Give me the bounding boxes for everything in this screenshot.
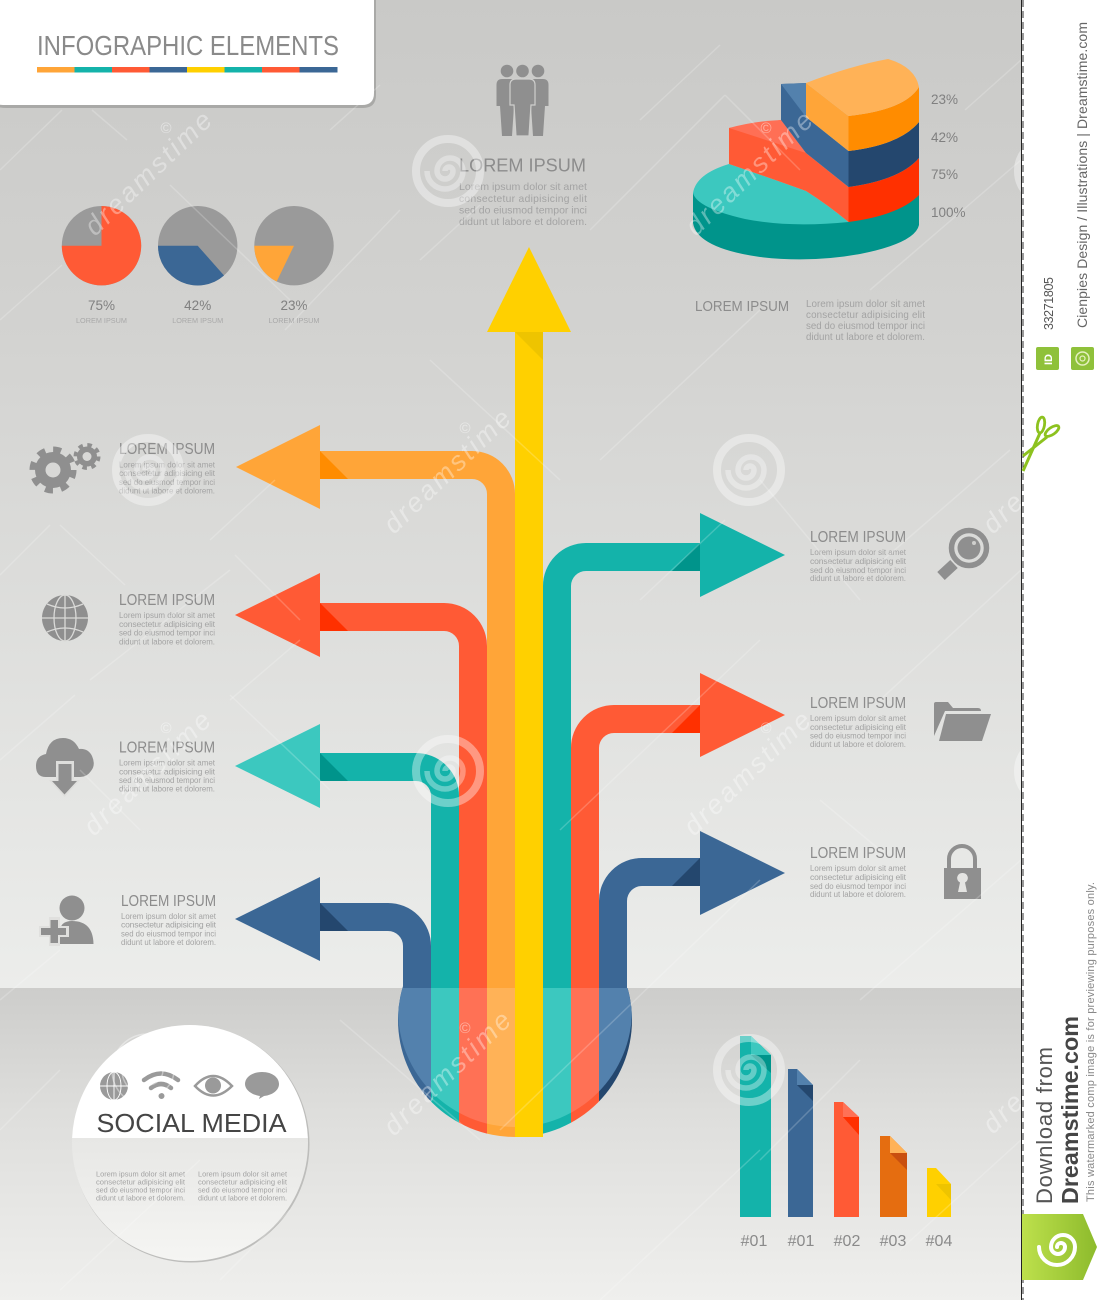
icon: globe: [42, 595, 88, 641]
arrow: orange left: [236, 425, 501, 990]
chart labels: 23%: [931, 92, 958, 107]
arrow: blue right: [613, 831, 785, 990]
row: add user: [39, 893, 217, 947]
text: lock: consectetur adipisicing elit: [810, 872, 907, 882]
text: social column 2: Lorem ipsum dolor sit amet: [198, 1170, 288, 1178]
text: search: consectetur adipisicing elit: [810, 556, 907, 566]
slice: 23% orange: [806, 59, 919, 151]
flat pie charts: [62, 206, 334, 325]
text: add user: Lorem ipsum dolor sit amet: [121, 911, 217, 921]
slice: 100% teal base: [693, 164, 919, 259]
text: lock: didunt ut labore et dolorem.: [810, 889, 906, 899]
text: folder: consectetur adipisicing elit: [810, 722, 907, 732]
text: gears: didunt ut labore et dolorem.: [119, 486, 215, 496]
text: globe: didunt ut labore et dolorem.: [119, 636, 215, 646]
icon: eye: [195, 1076, 232, 1096]
text block: chart caption: consectetur adipisicing elit: [806, 310, 925, 321]
bulb: arrow root: [395, 980, 635, 1140]
arrow: red left: [235, 573, 473, 990]
text: globe: consectetur adipisicing elit: [119, 619, 216, 629]
text: add user: [121, 893, 217, 947]
icon: speech bubble: [245, 1072, 279, 1099]
text: globe: Lorem ipsum dolor sit amet: [119, 610, 216, 620]
text: social column 2: consectetur adipisicing elit: [198, 1178, 288, 1186]
arrow: blue left: [235, 877, 417, 990]
panel: upper background: [0, 0, 1021, 988]
bar 2: [788, 1069, 813, 1217]
text: folder: [810, 695, 907, 749]
title: INFOGRAPHIC ELEMENTS: [37, 30, 339, 61]
text block: chart caption: sed do eiusmod tempor inci: [806, 321, 925, 332]
pie 42%: 42%: [184, 298, 211, 313]
heading: social media: SOCIAL MEDIA: [96, 1108, 287, 1138]
text block: top heading: [459, 154, 587, 228]
text: social column 1: consectetur adipisicing elit: [96, 1178, 186, 1186]
text block: chart caption: didunt ut labore et dolorem.: [806, 332, 925, 343]
icon: id badge: [1036, 347, 1059, 370]
pie 42%: LOREM IPSUM: [172, 316, 223, 325]
icon: magnifier: [941, 530, 986, 576]
icon: small globe: [100, 1072, 128, 1100]
text: cloud: Lorem ipsum dolor sit amet: [119, 758, 216, 768]
text: social column 1: didunt ut labore et dolorem.: [96, 1194, 185, 1202]
text: gears: Lorem ipsum dolor sit amet: [119, 460, 216, 470]
text: cloud: didunt ut labore et dolorem.: [119, 784, 215, 794]
watermark overlay: ©: [459, 1020, 471, 1037]
text: gears: LOREM IPSUM: [119, 441, 215, 458]
bar labels: #01: [741, 1233, 767, 1250]
text: social column 2: sed do eiusmod tempor inci: [198, 1186, 287, 1194]
text block: top heading: Lorem ipsum dolor sit amet: [459, 182, 587, 193]
text: search: didunt ut labore et dolorem.: [810, 573, 906, 583]
text: globe: [119, 592, 216, 646]
chart labels: [931, 92, 966, 220]
text: add user: LOREM IPSUM: [121, 893, 216, 910]
download heading: [1032, 1016, 1083, 1204]
row: folder: [810, 695, 991, 749]
icon: group of people: [496, 65, 548, 136]
text block: chart caption: LOREM IPSUM: [695, 299, 789, 315]
text block: chart caption: [695, 299, 925, 343]
text: folder: sed do eiusmod tempor inci: [810, 730, 906, 740]
bar 4: [880, 1136, 907, 1217]
arrow: teal right: [557, 513, 785, 990]
bar 1: [740, 1036, 771, 1217]
icon: add user: [39, 896, 94, 946]
watermark overlay: dreamstime: [77, 705, 217, 841]
icon: folder: [934, 702, 991, 741]
text: folder: LOREM IPSUM: [810, 695, 906, 712]
text block: top heading: consectetur adipisicing elit: [459, 194, 587, 205]
watermark overlay: ©: [459, 420, 471, 437]
text: folder: Lorem ipsum dolor sit amet: [810, 713, 907, 723]
text: globe: LOREM IPSUM: [119, 592, 215, 609]
text: folder: didunt ut labore et dolorem.: [810, 739, 906, 749]
row: globe: [42, 592, 216, 646]
pie 23%: [254, 206, 334, 325]
bar labels: #02: [834, 1233, 860, 1250]
text: lock: Lorem ipsum dolor sit amet: [810, 863, 907, 873]
icon: cloud download: [36, 738, 94, 797]
text: social column 1: sed do eiusmod tempor inci: [96, 1186, 185, 1194]
arrow: red right: [585, 673, 785, 990]
watermark overlay: dreamstime: [679, 105, 819, 241]
text: search: sed do eiusmod tempor inci: [810, 565, 906, 575]
text: globe: sed do eiusmod tempor inci: [119, 628, 215, 638]
text: lock: [810, 845, 907, 899]
row: lock: [810, 845, 981, 899]
pie 23%: LOREM IPSUM: [268, 316, 320, 325]
text: add user: sed do eiusmod tempor inci: [121, 928, 216, 938]
text: search: LOREM IPSUM: [810, 529, 906, 546]
icon: scissors: [1023, 417, 1061, 471]
panel: lower background: [0, 988, 1021, 1300]
bar labels: #04: [926, 1233, 952, 1250]
text: cloud: consectetur adipisicing elit: [119, 766, 216, 776]
text: social column 2: didunt ut labore et dolorem.: [198, 1194, 287, 1202]
icon: copyright badge: [1071, 347, 1094, 370]
chart labels: 100%: [931, 205, 966, 220]
watermark overlay: dreamstime: [377, 1005, 517, 1141]
text: search: Lorem ipsum dolor sit amet: [810, 547, 907, 557]
panel: social media circle: [72, 1025, 310, 1262]
arrow: yellow up: [487, 247, 571, 1137]
watermark overlay: dreamstime: [677, 705, 817, 841]
watermark overlay: ©: [160, 120, 172, 137]
3D stepped pie chart: [693, 59, 966, 259]
folded bar chart: [740, 1036, 952, 1250]
disclaimer: This watermarked comp image is for previewing purposes only.: [1085, 882, 1097, 1202]
bar labels: [741, 1233, 952, 1250]
text: gears: [119, 441, 216, 496]
pie 75%: LOREM IPSUM: [76, 316, 127, 325]
watermark overlay: dreamstime: [377, 403, 517, 539]
text: social column 2: [198, 1170, 288, 1202]
text: search: [810, 529, 907, 583]
row: cloud: [36, 738, 216, 797]
watermark overlay: ©: [760, 120, 772, 137]
title colour bar: [37, 67, 338, 72]
text: gears: sed do eiusmod tempor inci: [119, 477, 215, 487]
text: gears: consectetur adipisicing elit: [119, 468, 216, 478]
title card: [0, 0, 376, 108]
download heading: Dreamstime.com: [1057, 1016, 1083, 1204]
arrow: teal left: [235, 724, 445, 990]
image id: 33271805: [1042, 277, 1056, 330]
chart labels: 75%: [931, 167, 958, 182]
credit line: Cienpies Design / Illustrations | Dreamstime.com: [1074, 22, 1090, 328]
watermark overlay: ©: [760, 720, 772, 737]
slice: 42% blue: [781, 83, 919, 187]
bar 3: [834, 1102, 859, 1217]
text: social column 1: [96, 1170, 186, 1202]
text block: top heading: didunt ut labore et dolorem.: [459, 217, 587, 228]
pie 23%: 23%: [280, 298, 308, 313]
text: social column 1: Lorem ipsum dolor sit amet: [96, 1170, 186, 1178]
text: add user: didunt ut labore et dolorem.: [121, 937, 216, 947]
row: gears: [32, 441, 216, 496]
icon: padlock: [944, 846, 981, 899]
text: lock: sed do eiusmod tempor inci: [810, 881, 906, 891]
panel: side strip: [1021, 0, 1110, 1300]
text: add user: consectetur adipisicing elit: [121, 920, 217, 930]
chart labels: 42%: [931, 130, 958, 145]
bar 5: [927, 1168, 951, 1217]
slice: 75% red: [729, 120, 919, 222]
text: cloud: LOREM IPSUM: [119, 740, 215, 756]
text: cloud: sed do eiusmod tempor inci: [119, 775, 215, 785]
logo ribbon: [1022, 1214, 1097, 1280]
text block: chart caption: Lorem ipsum dolor sit amet: [806, 299, 925, 310]
text: lock: LOREM IPSUM: [810, 845, 906, 862]
text: cloud: [119, 740, 216, 794]
icon: gears: [32, 445, 98, 490]
text block: top heading: LOREM IPSUM: [459, 154, 586, 176]
pie 75%: 75%: [88, 298, 115, 313]
bar labels: #01: [788, 1233, 814, 1250]
icon: wifi: [144, 1074, 178, 1098]
row: search: [810, 529, 986, 583]
pie 42%: [158, 206, 237, 325]
bar labels: #03: [880, 1233, 906, 1250]
watermark overlay: ©: [160, 720, 172, 737]
download heading: Download from: [1032, 1047, 1057, 1204]
pie 75%: [62, 206, 141, 325]
icon: id badge: ID: [1043, 354, 1055, 365]
watermark overlay: dreamstime: [78, 105, 218, 241]
text block: top heading: sed do eiusmod tempor inci: [459, 206, 587, 216]
